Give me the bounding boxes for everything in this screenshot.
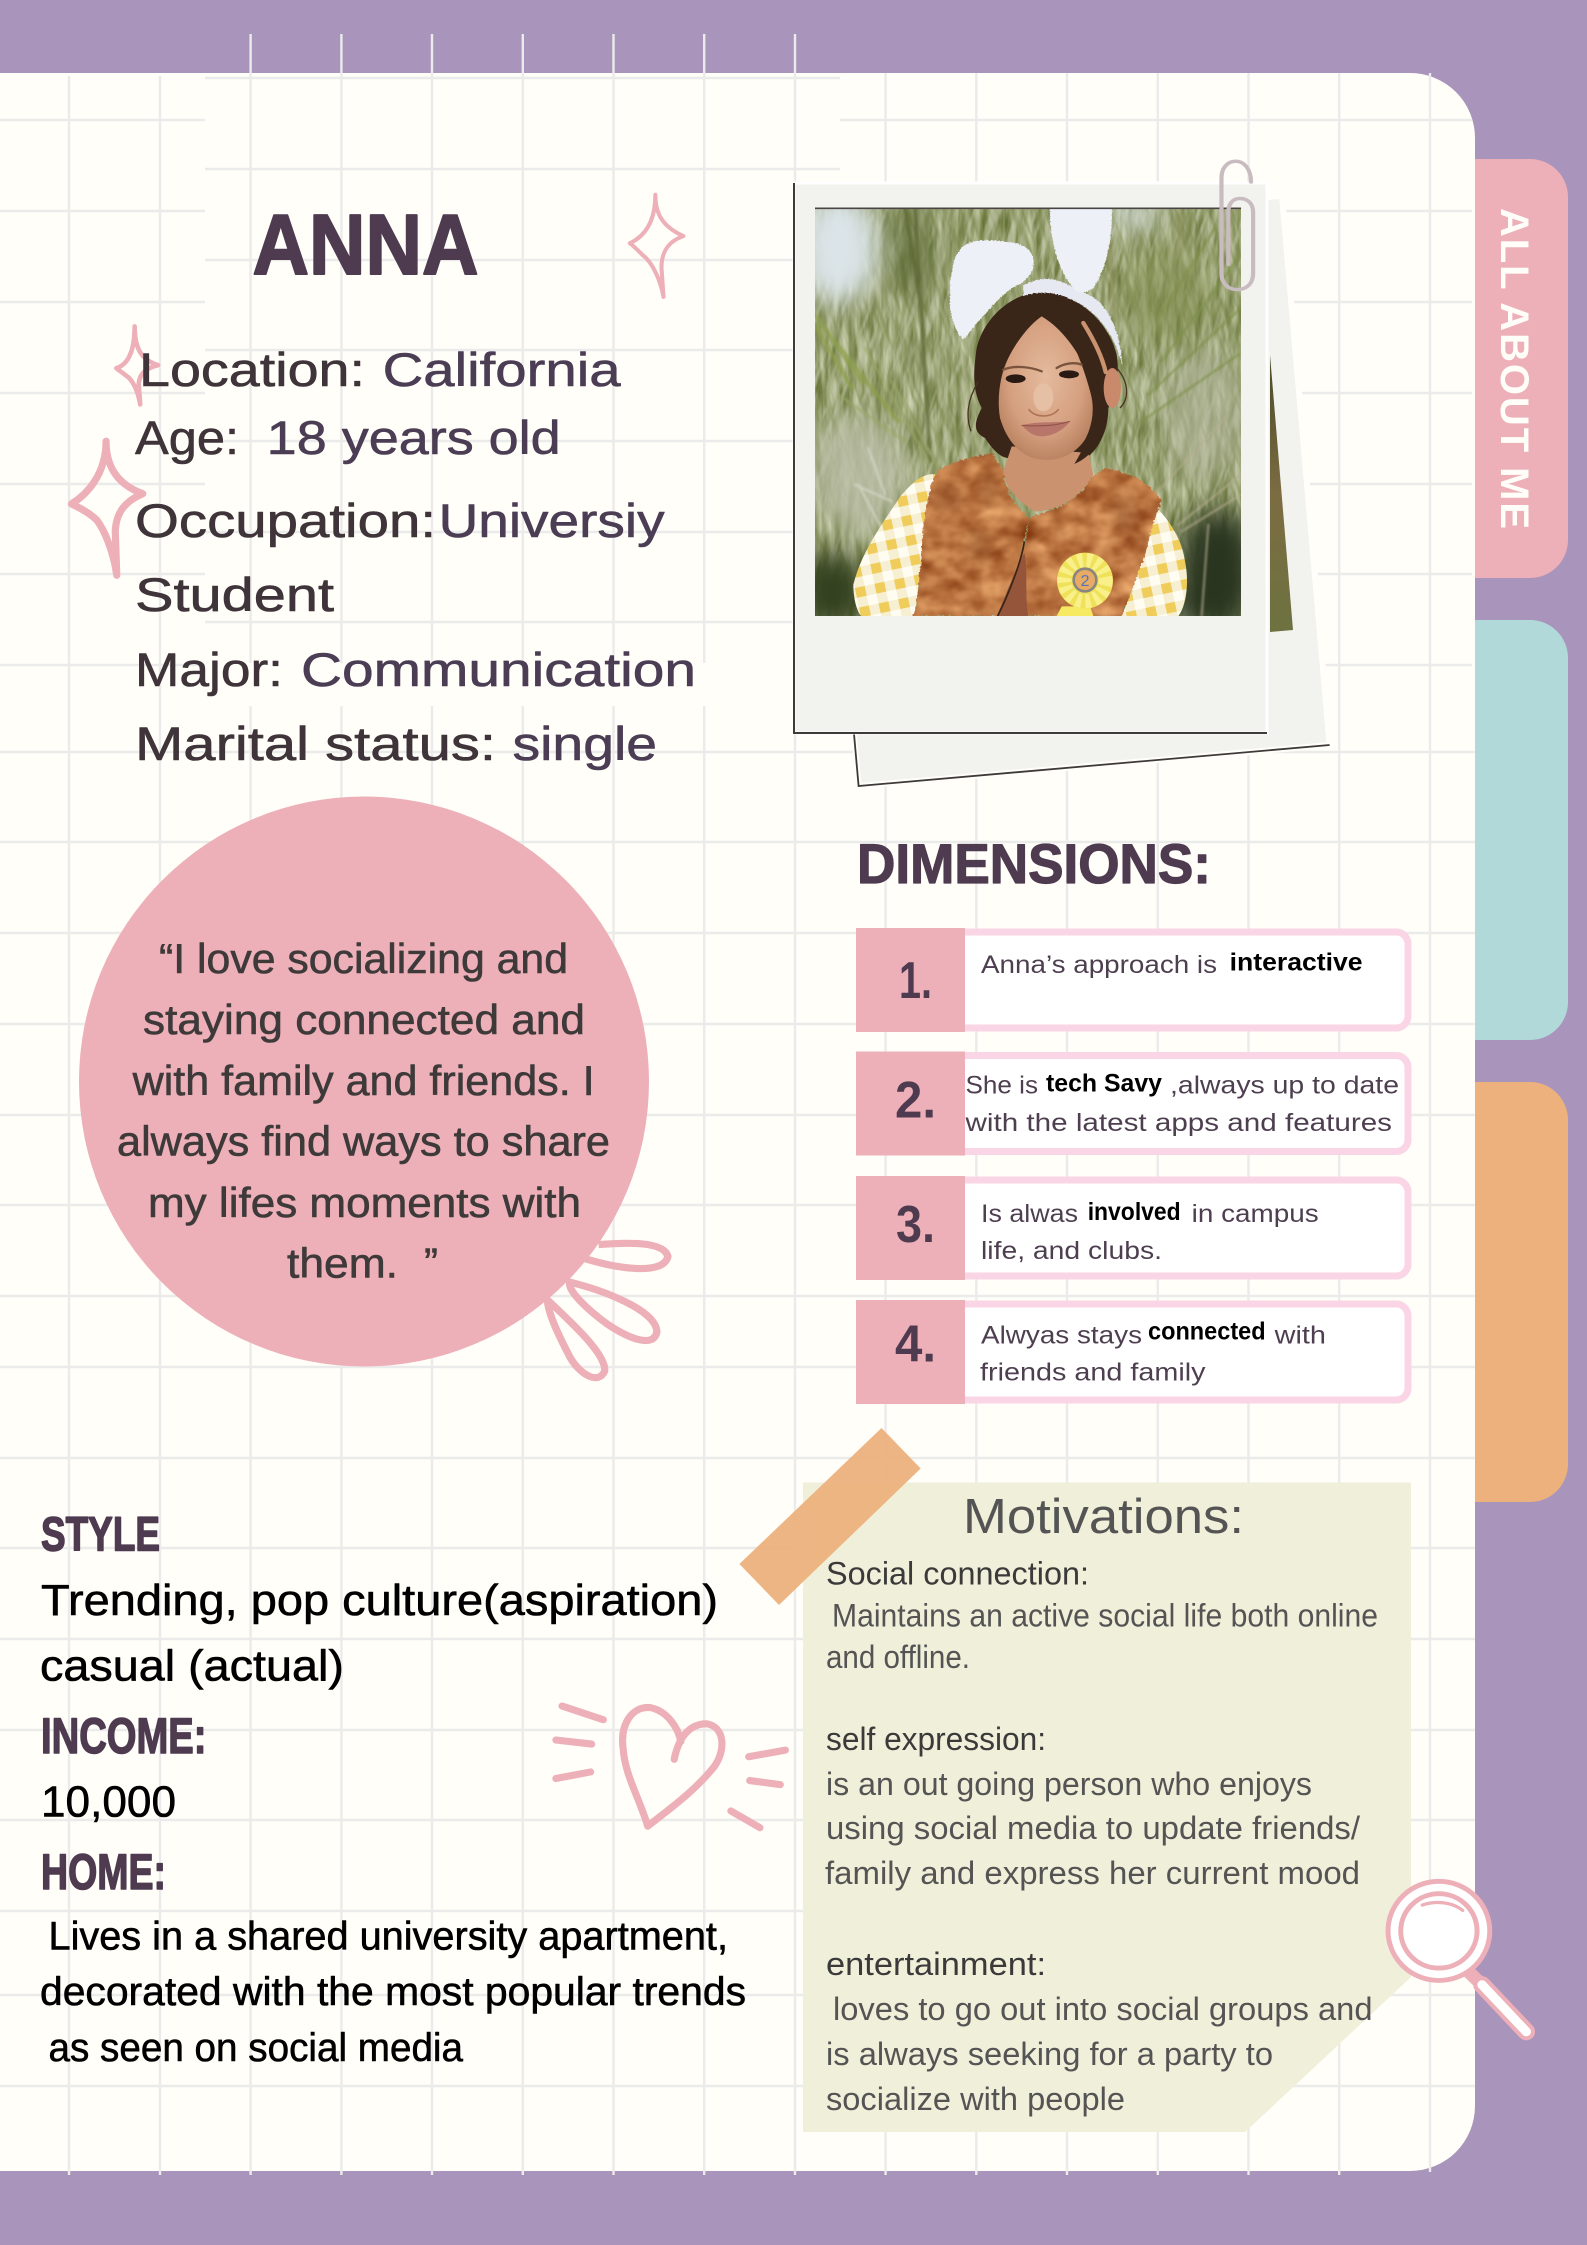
motivations text: loves to go out into social groups and — [833, 1991, 1372, 2027]
dimension row 3: life, and clubs. — [981, 1237, 1162, 1265]
text block: style, income, home: Lives in a shared university apartment, — [48, 1914, 728, 1958]
quote text: always find ways to share — [117, 1118, 610, 1165]
icon: magnifying glass — [1388, 1881, 1526, 2032]
bunny headband — [1023, 279, 1122, 366]
panel: motivations note — [803, 1482, 1411, 2132]
heading: dimensions: DIMENSIONS: — [857, 832, 1211, 895]
dimension row 4: friends and family — [980, 1359, 1206, 1387]
text block: personal details — [135, 343, 696, 770]
title: ANNA — [252, 198, 478, 293]
text block: personal details: Universiy — [439, 494, 665, 547]
background foliage — [815, 159, 1254, 616]
heading: style: STYLE — [41, 1508, 160, 1561]
dimension row 4: with — [1274, 1322, 1326, 1350]
heading: home: HOME: — [41, 1844, 166, 1900]
dimension row 1: 1. — [899, 952, 932, 1010]
dimension row 2: 2. — [895, 1072, 936, 1130]
text block: style, income, home: Trending, pop culture(aspiration) — [41, 1576, 718, 1625]
dimension row 2: She is — [966, 1072, 1038, 1100]
photo of Anna with bunny ears — [815, 159, 1254, 616]
tab: all about me — [1470, 159, 1568, 578]
rosette badge — [1057, 553, 1113, 616]
quote text: “I love socializing and — [159, 935, 568, 982]
ear — [1104, 368, 1121, 408]
dimension row 3: 3. — [896, 1196, 935, 1254]
icon: heart with rays — [556, 1706, 785, 1828]
dimension row 4 — [856, 1300, 1408, 1404]
icon: paperclip — [1221, 161, 1253, 290]
dimension row 2: with the latest apps and features — [964, 1109, 1392, 1137]
text block: style, income, home: 10,000 — [41, 1778, 176, 1827]
dimension row 3: involved — [1088, 1198, 1181, 1226]
dimension row 2: ,always up to date — [1170, 1072, 1399, 1100]
quote text — [117, 935, 610, 1286]
motivations text: is an out going person who enjoys — [826, 1766, 1312, 1802]
motivations text: entertainment: — [826, 1946, 1046, 1982]
text block: personal details: Student — [135, 568, 334, 621]
text block: personal details: 18 years old — [267, 411, 561, 464]
text block: personal details: Marital status: — [135, 717, 496, 770]
quote text: staying connected and — [143, 996, 585, 1043]
text block: style, income, home: casual (actual) — [40, 1642, 344, 1691]
text block: personal details: Location: — [139, 343, 365, 396]
text block: personal details: Occupation: — [135, 494, 436, 547]
dimension row 4: 4. — [895, 1316, 936, 1374]
dimension row 4: Alwyas stays — [981, 1322, 1142, 1350]
quote text: them. — [287, 1239, 398, 1286]
dimension row 3: Is alwas — [981, 1200, 1078, 1228]
hair — [974, 291, 1118, 461]
tab: orange — [1470, 1082, 1568, 1502]
fur vest — [913, 453, 1162, 616]
text block: personal details: Age: — [135, 411, 239, 464]
quote text: my lifes moments with — [148, 1179, 581, 1226]
motivations text: self expression: — [826, 1721, 1046, 1757]
dimension row 1: interactive — [1230, 948, 1363, 976]
polaroid photo stack — [792, 160, 1330, 787]
icon: small sparkle — [116, 326, 158, 404]
dimension row 1: Anna’s approach is — [981, 951, 1217, 979]
motivations text: family and express her current mood — [825, 1855, 1360, 1891]
motivations text: Social connection: — [826, 1555, 1089, 1591]
quote text: ” — [424, 1239, 438, 1286]
facial features — [1003, 363, 1082, 436]
dimension row 2 — [856, 1052, 1408, 1156]
bunny ear left — [950, 240, 1034, 340]
quote bubble — [79, 796, 668, 1378]
motivations text: and offline. — [826, 1639, 970, 1675]
tape — [739, 1428, 921, 1605]
icon: large sparkle — [71, 441, 143, 575]
text block: style, income, home — [40, 1508, 746, 2070]
left sleeve — [853, 474, 938, 616]
petals decoration — [548, 1243, 668, 1378]
neck — [1003, 446, 1093, 511]
dimension row 3: in campus — [1192, 1200, 1319, 1228]
heading: motivations: Motivations: — [963, 1490, 1244, 1544]
bunny ear right — [1050, 201, 1112, 292]
dimension row 4: connected — [1148, 1318, 1266, 1346]
text block: personal details: Communication — [301, 643, 696, 696]
front polaroid frame — [794, 183, 1267, 733]
text block: style, income, home: decorated with the most popular trends — [40, 1970, 746, 2014]
inner dress — [997, 553, 1028, 616]
text block: personal details: Major: — [135, 643, 283, 696]
right sleeve — [1122, 503, 1187, 616]
dimension row 1 — [856, 928, 1408, 1032]
dimension row 3 — [856, 1176, 1408, 1280]
motivations text: is always seeking for a party to — [826, 2036, 1273, 2072]
motivations text — [825, 1555, 1378, 2117]
right hair strand — [1074, 352, 1093, 464]
text block: personal details: single — [512, 717, 657, 770]
back polaroid — [840, 196, 1330, 786]
text block: style, income, home: as seen on social media — [48, 2026, 464, 2070]
tab: all about me: ALL ABOUT ME — [1492, 208, 1536, 529]
text block: personal details: California — [383, 343, 622, 396]
quote text: with family and friends. I — [132, 1057, 595, 1104]
tab: teal — [1470, 620, 1568, 1040]
rosette badge: 2 — [1081, 573, 1090, 590]
motivations text: socialize with people — [826, 2081, 1125, 2117]
dimension row 2: tech Savy — [1046, 1070, 1162, 1098]
motivations text: using social media to update friends/ — [826, 1810, 1360, 1846]
face — [999, 316, 1093, 460]
icon: sparkle top right — [630, 195, 683, 297]
heading: income: INCOME: — [41, 1708, 206, 1764]
motivations text: Maintains an active social life both online — [832, 1597, 1378, 1633]
